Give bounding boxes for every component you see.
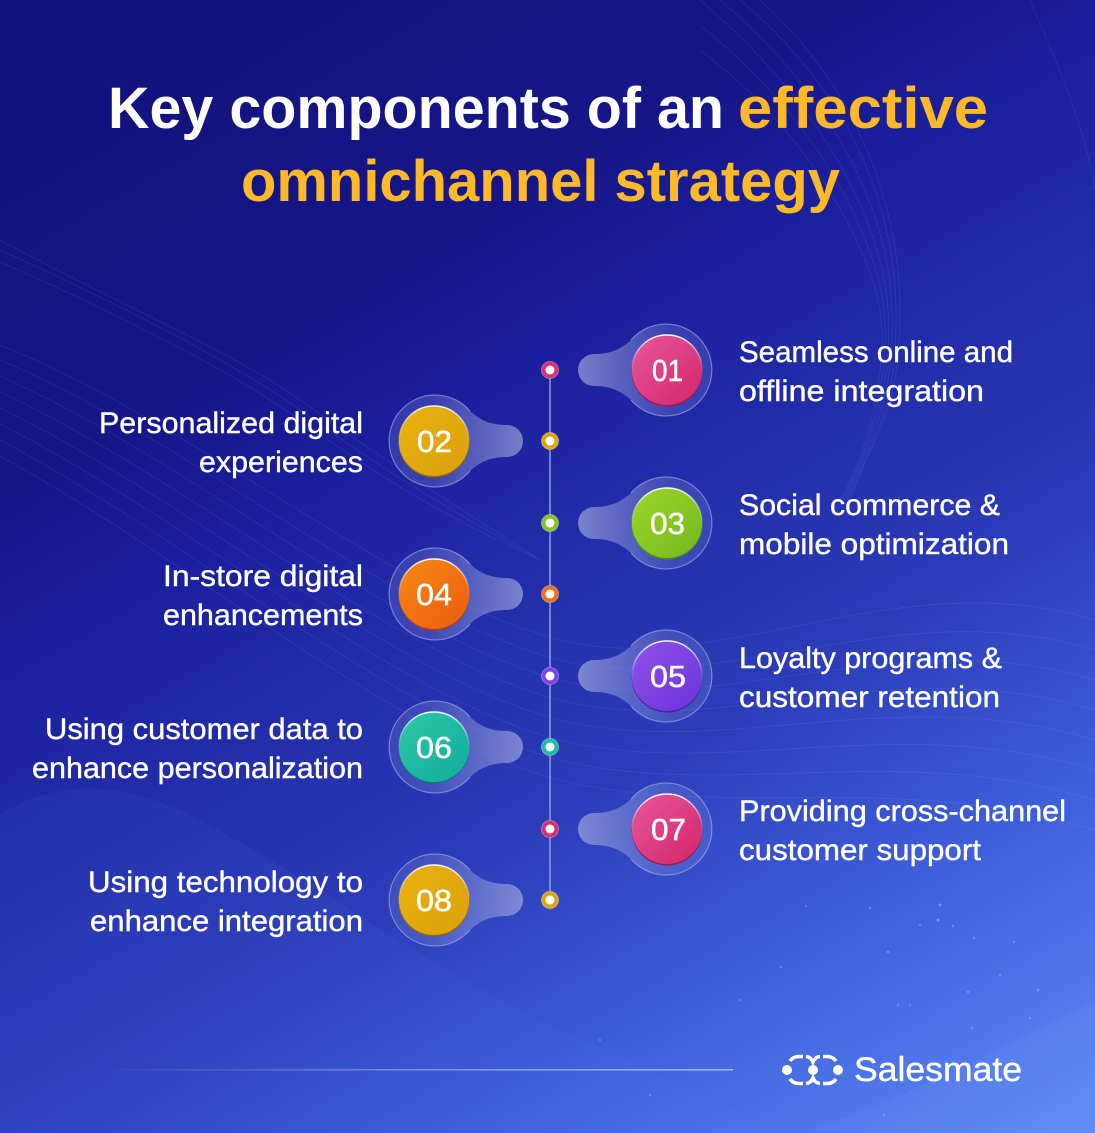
item 04: enhancements	[163, 599, 363, 632]
item 03: 03	[650, 506, 685, 541]
item 04: In-store digital	[163, 560, 363, 593]
item 04: 04	[416, 577, 452, 612]
item 05: customer retention	[739, 681, 1000, 714]
item 05	[542, 630, 1002, 722]
item 06: Using customer data to	[45, 713, 363, 746]
item 01: Seamless online and	[739, 336, 1013, 369]
logo: Salesmate	[782, 1051, 1022, 1089]
title: omnichannel strategy	[241, 149, 840, 214]
item 02: 02	[417, 424, 452, 459]
item 01	[542, 324, 1013, 416]
footer line	[95, 1069, 733, 1071]
item 02	[99, 395, 558, 487]
item 08: 08	[416, 883, 452, 918]
item 06	[32, 701, 558, 793]
item 04	[163, 548, 558, 640]
item 08: Using technology to	[88, 866, 363, 899]
item 01: offline integration	[739, 375, 984, 408]
title: Key components of an	[108, 76, 724, 141]
item 03: mobile optimization	[739, 528, 1009, 561]
title: effective	[738, 76, 988, 141]
item 08	[88, 854, 558, 946]
item 08: enhance integration	[90, 905, 363, 938]
item 06: enhance personalization	[32, 752, 363, 785]
item 03	[542, 477, 1009, 569]
item 06: 06	[416, 730, 452, 765]
item 07	[542, 783, 1066, 875]
item 07: Providing cross-channel	[739, 795, 1066, 828]
item 02: experiences	[199, 446, 363, 479]
icon: logo mark	[782, 1056, 843, 1084]
item 05: 05	[650, 659, 686, 694]
item 01: 01	[652, 353, 683, 388]
title	[108, 76, 988, 214]
item 07: 07	[651, 812, 686, 847]
item 07: customer support	[739, 834, 982, 867]
item 02: Personalized digital	[99, 407, 363, 440]
background speckles	[599, 904, 1039, 1116]
timeline line	[549, 370, 551, 900]
item 03: Social commerce &	[739, 489, 1000, 522]
logo: Salesmate: Salesmate	[854, 1051, 1022, 1089]
item 05: Loyalty programs &	[739, 642, 1002, 675]
